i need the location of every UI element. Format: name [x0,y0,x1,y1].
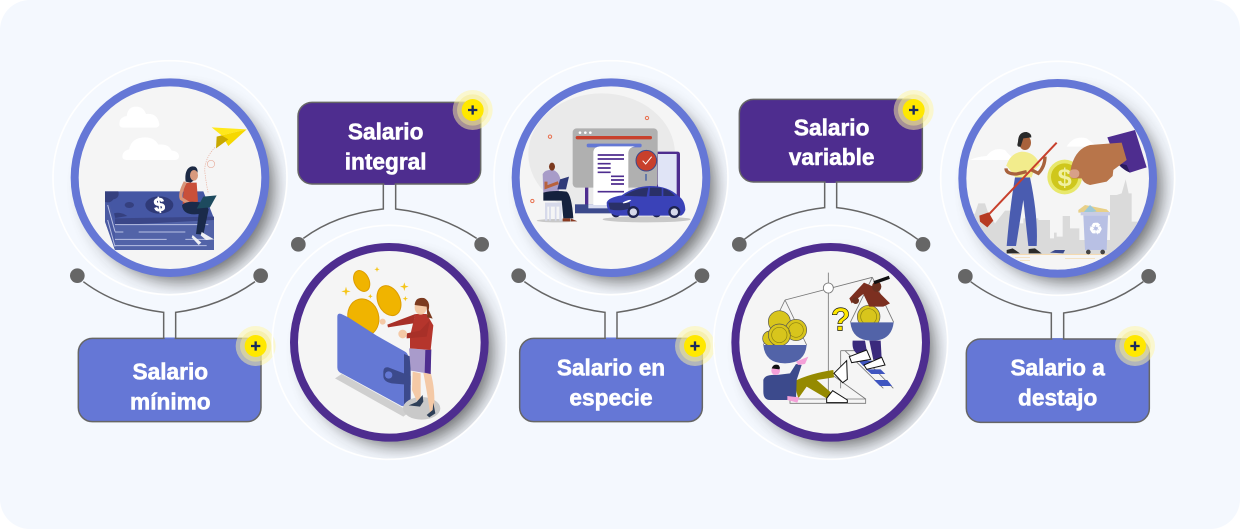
label box: mínimo [130,388,211,414]
icon: plus button [453,90,493,130]
connector [511,268,709,338]
icon: plus button [1115,326,1155,366]
icon: climbing person [849,277,890,369]
icon: money stack [105,191,214,250]
icon: backdrop blob [528,93,675,215]
icon: screen and document [573,128,680,213]
icon: scale frame and stairs [763,273,894,403]
label box [966,339,1149,422]
connector [70,268,268,338]
label box [78,338,261,422]
icon: money stack: $ [153,195,166,217]
icon: paper plane [205,127,247,193]
label box: Salario [133,358,208,384]
icon: hand with coin: $ [1058,164,1072,192]
icon: sweeping woman [979,132,1065,253]
label box: Salario [348,118,423,144]
icon: plus button [236,326,276,366]
column: Salario integral [272,90,506,459]
icon: recycling bin [1078,205,1110,254]
icon: decorative rings [531,116,649,203]
icon: car [603,186,691,222]
column: Salario a destajo [941,61,1175,422]
icon: coins and sparkles [341,267,409,339]
icon: question mark: ? [831,302,850,338]
label box: destajo [1018,385,1097,411]
scale pivot [823,283,833,293]
column: Salario mínimo [53,61,287,422]
icon: city skyline [967,138,1148,271]
label box: variable [789,144,874,170]
icon: scale pans [763,322,894,363]
label box: integral [345,148,427,174]
connector [958,269,1156,339]
label box: especie [569,385,653,411]
label box [298,102,481,184]
icon: hand with coin [1047,130,1147,194]
label box [520,338,702,422]
icon: seated man [537,163,577,222]
icon: coins on scale [763,305,880,346]
icon: plus button [894,90,934,130]
icon: wallet [335,314,411,417]
label box: Salario [794,114,869,140]
label box [739,99,922,182]
icon: plus button [675,326,715,366]
column: Salario en especie [494,61,728,422]
icon: reclining person [763,357,847,403]
label box: Salario a [1010,355,1105,381]
connector [291,184,489,252]
icon: businesswoman [380,298,440,420]
icon: recycling bin: ♻ [1089,221,1103,238]
icon: clouds [119,107,179,160]
column: Salario variable [714,90,948,459]
label box: Salario en [557,355,665,381]
connector [732,182,930,252]
icon: woman with laptop [181,166,217,245]
